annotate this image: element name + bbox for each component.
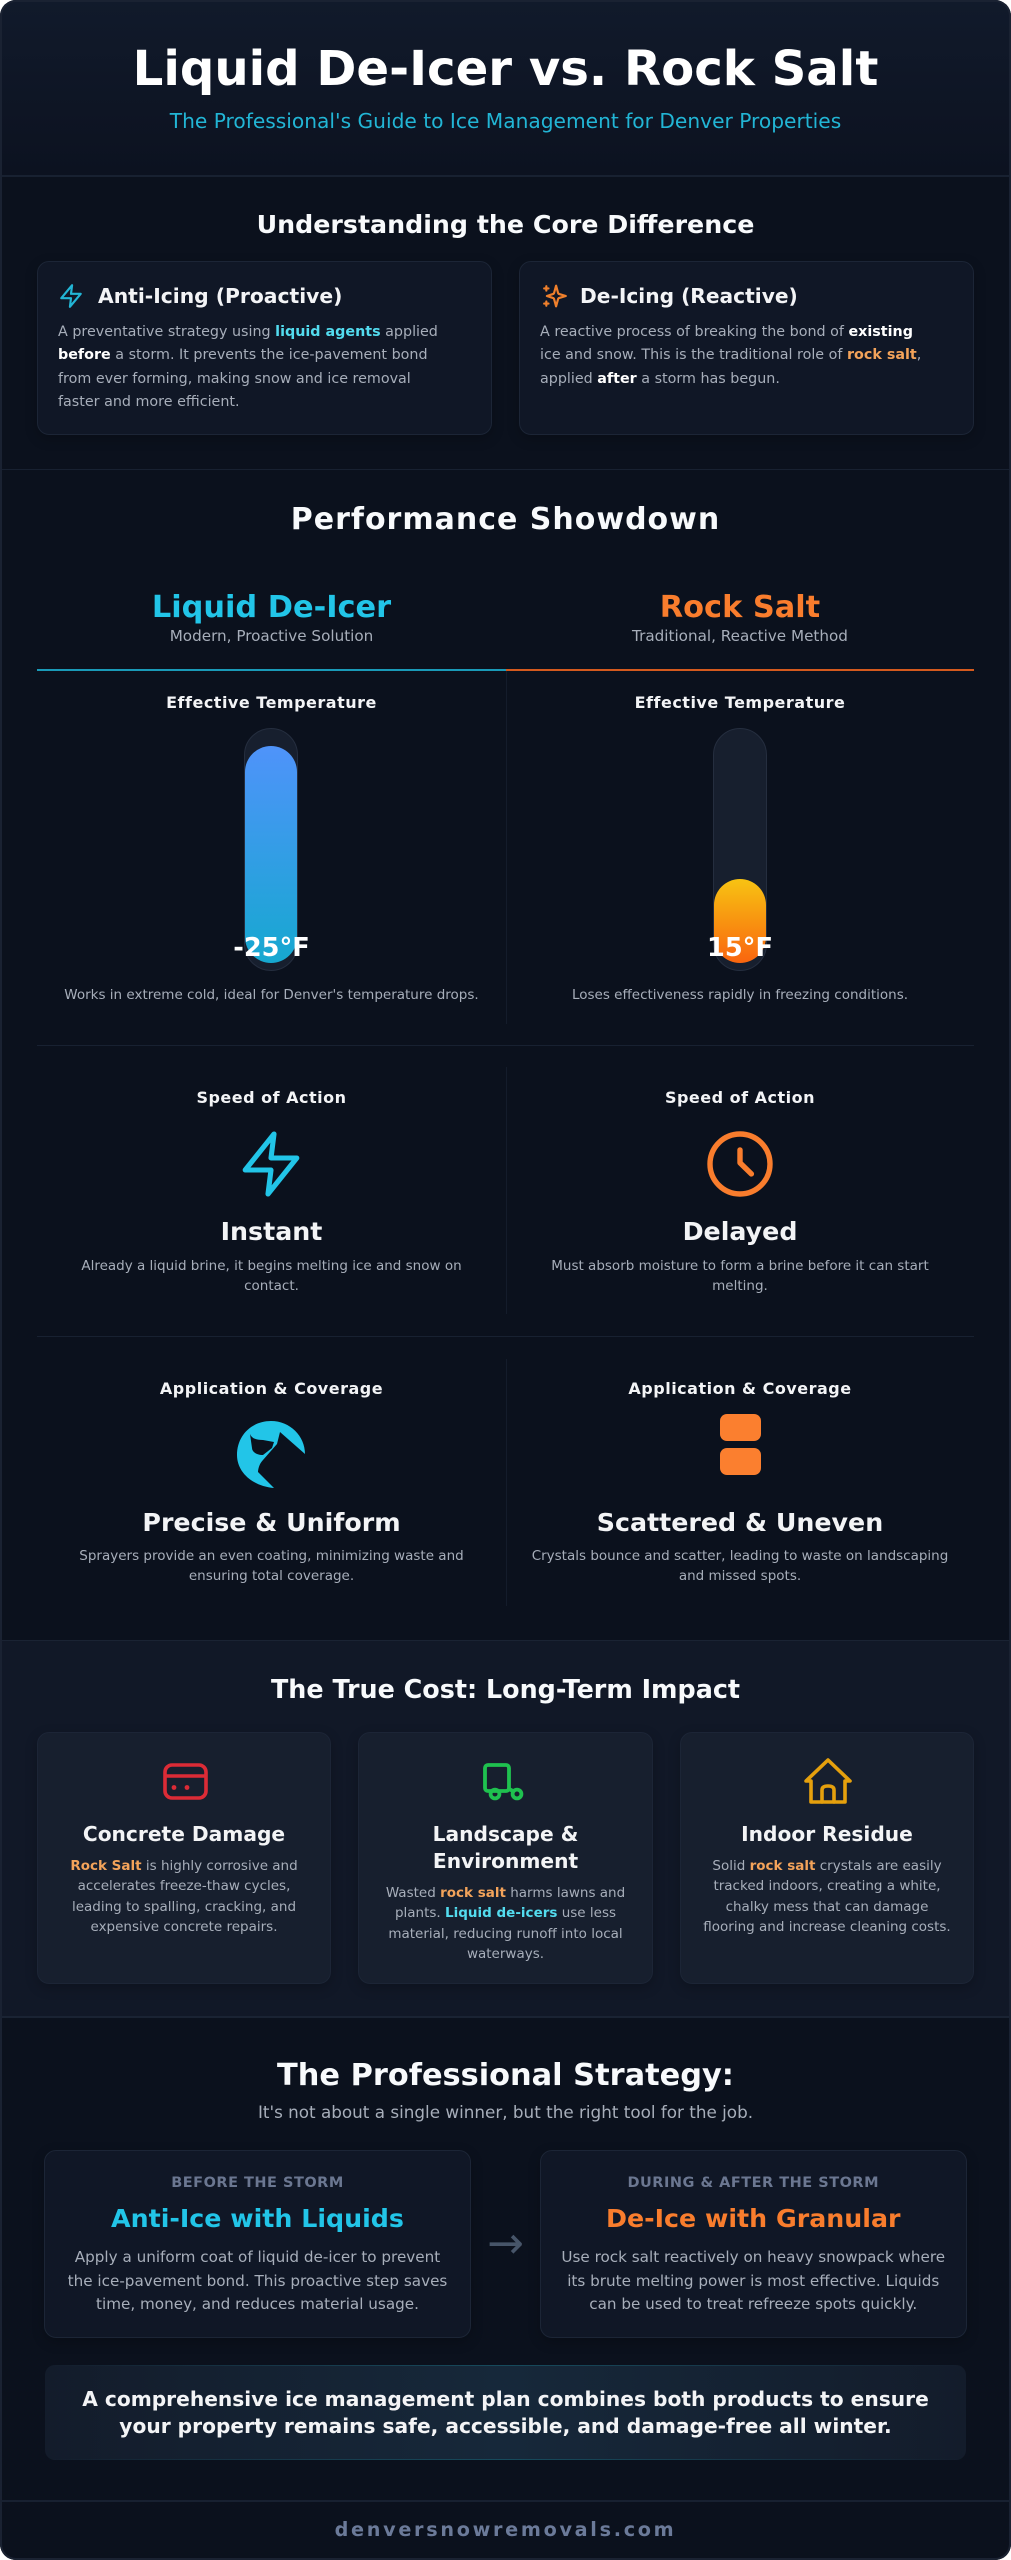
section: performance showdown	[0, 470, 1011, 1640]
section heading: Understanding the Core Difference	[257, 210, 754, 239]
card title: Environment	[433, 1849, 578, 1873]
icon: granules	[720, 1414, 761, 1475]
description: Already a liquid brine, it begins melting ice and snow on	[81, 1258, 462, 1274]
card text: before a storm. It prevents the ice-pavement bond	[58, 347, 428, 363]
column title: Rock Salt	[660, 590, 820, 625]
card text: accelerates freeze-thaw cycles,	[78, 1878, 290, 1894]
icon: clock	[707, 1131, 773, 1197]
card text	[70, 1858, 298, 1935]
description: Sprayers provide an even coating, minimizing waste and	[79, 1548, 464, 1564]
card: indoor residue	[680, 1732, 974, 1984]
strategy text: time, money, and reduces material usage.	[96, 2295, 419, 2313]
timing label: DURING & AFTER THE STORM	[627, 2175, 879, 2191]
icon: spreader	[483, 1763, 524, 1800]
card text: A reactive process of breaking the bond of existing	[540, 324, 913, 340]
label: Application & Coverage	[628, 1379, 852, 1398]
column subtitle: Modern, Proactive Solution	[170, 627, 373, 645]
description: Must absorb moisture to form a brine before it can start	[551, 1258, 929, 1274]
arrow: →	[487, 2218, 524, 2269]
card: before the storm	[44, 2150, 471, 2338]
icon: lightning bolt	[242, 1132, 300, 1196]
coverage: liquid	[79, 1379, 464, 1584]
speed: rock salt	[551, 1088, 929, 1294]
footer	[0, 2500, 1011, 2560]
strategy text	[561, 2248, 945, 2313]
section heading: Performance Showdown	[291, 502, 720, 537]
card text: chalky mess that can damage	[726, 1899, 928, 1915]
temperature: rock salt	[572, 693, 908, 1002]
conclusion banner	[45, 2365, 966, 2460]
card text: material, reducing runoff into local	[388, 1926, 623, 1942]
description: melting.	[712, 1278, 768, 1294]
card text: expensive concrete repairs.	[90, 1919, 278, 1935]
icon: lightning bolt	[60, 284, 82, 308]
card text: plants. Liquid de-icers use less	[395, 1905, 616, 1921]
description: Loses effectiveness rapidly in freezing conditions.	[572, 986, 908, 1002]
subtitle: The Professional's Guide to Ice Management for Denver Properties	[170, 109, 841, 133]
coverage: rock salt	[532, 1379, 948, 1584]
card: during and after the storm	[540, 2150, 967, 2338]
strategy text: can be used to treat refreeze spots quickly.	[589, 2295, 917, 2313]
section subheading: It's not about a single winner, but the right tool for the job.	[258, 2102, 753, 2122]
label: Application & Coverage	[160, 1379, 383, 1398]
label: Speed of Action	[665, 1088, 815, 1107]
card heading: De-Icing (Reactive)	[580, 284, 798, 308]
temperature: liquid	[64, 693, 479, 1002]
label: Effective Temperature	[635, 693, 845, 712]
icon: spray	[237, 1421, 305, 1488]
strategy text: Use rock salt reactively on heavy snowpack where	[561, 2248, 945, 2266]
card text	[58, 324, 438, 410]
card text: from ever forming, making snow and ice removal	[58, 371, 411, 387]
section: true cost	[0, 1640, 1011, 2018]
timing label: BEFORE THE STORM	[171, 2175, 344, 2191]
label: Effective Temperature	[166, 693, 377, 712]
card text: Solid rock salt crystals are easily	[712, 1858, 942, 1874]
description	[551, 1258, 929, 1294]
result: Delayed	[683, 1217, 797, 1246]
thermometer	[244, 728, 298, 971]
card text	[703, 1858, 951, 1935]
temperature value: -25°F	[233, 933, 310, 963]
card heading: Anti-Icing (Proactive)	[98, 284, 342, 308]
label: Speed of Action	[196, 1088, 347, 1107]
result: Instant	[221, 1217, 322, 1246]
description: ensuring total coverage.	[189, 1568, 354, 1584]
card text: Rock Salt is highly corrosive and	[70, 1858, 298, 1874]
conclusion text	[82, 2387, 929, 2438]
card text: waterways.	[467, 1946, 544, 1962]
column header: liquid de-icer	[152, 590, 392, 645]
card text: A preventative strategy using liquid agents applied	[58, 324, 438, 340]
description: contact.	[244, 1278, 299, 1294]
card: landscape	[358, 1732, 653, 1984]
card title: Concrete Damage	[83, 1822, 285, 1846]
card text: leading to spalling, cracking, and	[72, 1899, 296, 1915]
card text: Wasted rock salt harms lawns and	[386, 1885, 625, 1901]
column title: Liquid De-Icer	[152, 590, 391, 625]
strategy title: De-Ice with Granular	[606, 2204, 901, 2233]
description: Works in extreme cold, ideal for Denver's temperature drops.	[64, 986, 479, 1002]
icon: concrete	[163, 1763, 208, 1800]
speed: liquid	[81, 1088, 462, 1294]
thermometer	[713, 728, 767, 971]
strategy title: Anti-Ice with Liquids	[111, 2204, 404, 2233]
website: denversnowremovals.com	[335, 2518, 676, 2541]
thermometer fill	[714, 879, 766, 963]
section: core difference	[0, 177, 1011, 471]
description: and missed spots.	[679, 1568, 801, 1584]
column subtitle: Traditional, Reactive Method	[632, 627, 848, 645]
strategy text: Apply a uniform coat of liquid de-icer to prevent	[75, 2248, 440, 2266]
title: Liquid De-Icer vs. Rock Salt	[133, 41, 878, 97]
description	[532, 1548, 948, 1584]
result: Precise & Uniform	[142, 1508, 401, 1537]
description	[81, 1258, 462, 1294]
header	[0, 0, 1011, 177]
card: anti-icing	[37, 261, 492, 435]
section heading: The True Cost: Long-Term Impact	[271, 1674, 740, 1704]
result: Scattered & Uneven	[597, 1508, 883, 1537]
card text: flooring and increase cleaning costs.	[703, 1919, 951, 1935]
strategy text	[68, 2248, 447, 2313]
icon: house	[804, 1758, 852, 1804]
conclusion text: A comprehensive ice management plan combines both products to ensure	[82, 2387, 929, 2411]
card: concrete damage	[37, 1732, 331, 1984]
description	[79, 1548, 464, 1584]
card: de-icing	[519, 261, 974, 435]
card text	[540, 324, 921, 387]
temperature value: 15°F	[707, 933, 773, 963]
section: professional strategy	[0, 2018, 1011, 2500]
card text: applied after a storm has begun.	[540, 371, 780, 387]
card text: tracked indoors, creating a white,	[713, 1878, 941, 1894]
card title: Landscape &	[433, 1822, 578, 1846]
card title	[433, 1822, 578, 1873]
icon: sparkles	[543, 284, 567, 308]
card text: ice and snow. This is the traditional role of rock salt,	[540, 347, 921, 363]
conclusion text: your property remains safe, accessible, and damage-free all winter.	[119, 2414, 892, 2438]
strategy text: the ice-pavement bond. This proactive step saves	[68, 2272, 447, 2290]
column header: rock salt	[632, 590, 848, 645]
card title: Indoor Residue	[741, 1822, 913, 1846]
strategy text: its brute melting power is most effective. Liquids	[567, 2272, 939, 2290]
thermometer fill	[245, 746, 297, 963]
section heading: The Professional Strategy:	[277, 2058, 734, 2093]
description: Crystals bounce and scatter, leading to waste on landscaping	[532, 1548, 948, 1564]
card text	[386, 1885, 625, 1962]
card text: faster and more efficient.	[58, 394, 240, 410]
